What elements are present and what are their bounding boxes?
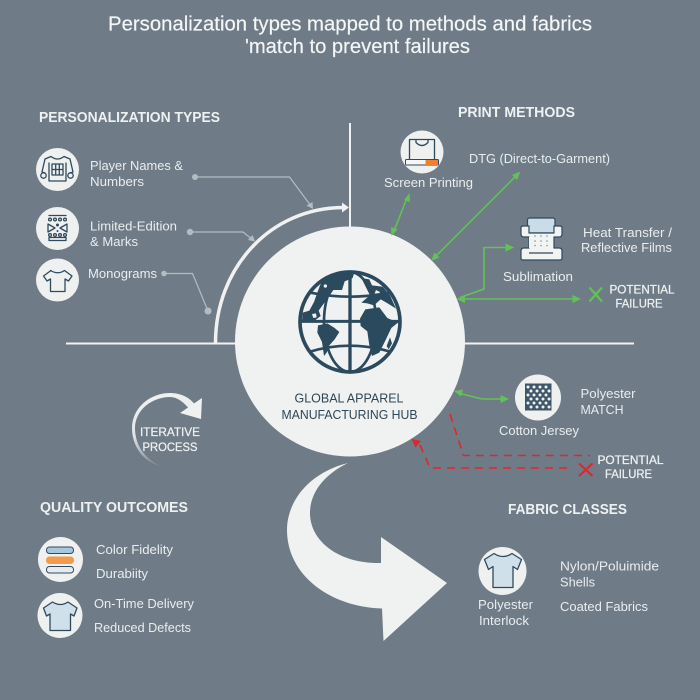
- arrow: hub to cotton jersey: [454, 390, 509, 403]
- label: nylon shells: Nylon/Poluimide: [560, 560, 659, 574]
- label: polyester interlock: Interlock: [479, 614, 530, 628]
- icon: t-shirt: [36, 258, 79, 302]
- hub circle: [235, 226, 465, 456]
- label: polyester interlock: Polyester: [478, 598, 533, 612]
- label: iterative process: [140, 425, 200, 454]
- icon: green cross: [590, 288, 602, 302]
- icon: knit swatch: [515, 374, 561, 420]
- label: polyester interlock: [478, 598, 533, 628]
- arrow: hub to DTG: [431, 172, 520, 261]
- label: player names and numbers: Player Names &: [90, 159, 184, 173]
- label: potential failure red: POTENTIAL: [598, 455, 664, 467]
- iterative process: [132, 393, 202, 466]
- label: polyester match: Polyester: [580, 387, 636, 401]
- label: player names and numbers: [90, 159, 184, 189]
- heading: print methods: PRINT METHODS: [458, 105, 575, 121]
- label: cotton jersey: Cotton Jersey: [499, 424, 580, 438]
- label: nylon shells: Shells: [560, 576, 595, 590]
- label: potential failure: FAILURE: [616, 298, 663, 310]
- label: coated fabrics: Coated Fabrics: [560, 600, 648, 614]
- iterative arc arrow: [132, 393, 202, 466]
- label: screen printing: Screen Printing: [384, 176, 473, 190]
- label: potential failure: POTENTIAL: [610, 284, 675, 296]
- label: durability: Durabiity: [96, 567, 149, 581]
- vertical axis line: [349, 123, 351, 230]
- icon: fabric layers: [38, 537, 83, 582]
- icon: sublimation press: [521, 218, 562, 260]
- hub label: [282, 392, 418, 422]
- hub label: GLOBAL APPAREL: [294, 392, 404, 406]
- title: Personalization types mapped to methods and fabrics: [108, 14, 592, 36]
- heading: personalization types: PERSONALIZATION TYPES: [39, 110, 220, 126]
- label: limited edition and marks: [90, 220, 177, 249]
- icon: globe: [300, 272, 400, 372]
- arrow: hub to potential failure: [456, 295, 581, 303]
- panel: print methods: [384, 105, 675, 310]
- curved arrow around hub: [216, 202, 349, 343]
- leader: monograms: [161, 271, 212, 314]
- icon: light blue tee: [478, 547, 526, 595]
- label: heat transfer and reflective films: Heat Transfer /: [583, 226, 673, 240]
- panel: personalization types: [36, 110, 313, 314]
- panel: quality outcomes: [38, 500, 195, 638]
- label: DTG: DTG (Direct-to-Garment): [469, 152, 610, 166]
- label: polyester match: MATCH: [580, 403, 624, 417]
- dashed failure line lower: [412, 439, 572, 468]
- heading: quality outcomes: QUALITY OUTCOMES: [40, 500, 188, 516]
- icon: jersey with numbers: [36, 148, 79, 191]
- label: reduced defects: Reduced Defects: [94, 621, 191, 635]
- label: heat transfer and reflective films: Reflective Films: [581, 241, 672, 255]
- icon: limited edition marks: [36, 207, 79, 250]
- title: [108, 14, 592, 58]
- big curved arrow: [287, 463, 447, 641]
- label: iterative process: PROCESS: [142, 440, 198, 454]
- leader arrow: limited edition: [187, 229, 255, 242]
- label: heat transfer and reflective films: [581, 226, 673, 255]
- arrow: hub to sublimation: [460, 244, 514, 298]
- icon: screen printing: [400, 130, 444, 174]
- leader arrow: player names: [192, 174, 313, 209]
- label: sublimation: Sublimation: [503, 270, 573, 284]
- label: nylon shells: [560, 560, 659, 590]
- label: on-time delivery: On-Time Delivery: [94, 597, 195, 611]
- label: limited edition and marks: Limited-Edition: [90, 220, 177, 234]
- label: player names and numbers: Numbers: [90, 175, 144, 189]
- icon: red cross: [579, 464, 592, 476]
- label: monograms: Monograms: [88, 267, 157, 281]
- label: polyester match: [580, 387, 636, 417]
- label: potential failure: [610, 284, 675, 310]
- panel: fabric classes: [412, 374, 664, 628]
- hub label: MANUFACTURING HUB: [282, 408, 418, 422]
- label: limited edition and marks: & Marks: [90, 235, 138, 249]
- horizontal axis line: [66, 342, 634, 344]
- label: potential failure red: [598, 455, 664, 481]
- title: 'match to prevent failures: [245, 36, 470, 58]
- heading: fabric classes: FABRIC CLASSES: [508, 502, 627, 518]
- icon: light tee outcome: [38, 593, 82, 638]
- arrow: hub to screen printing: [391, 193, 410, 236]
- dashed failure line upper: [450, 414, 590, 456]
- label: potential failure red: FAILURE: [605, 469, 652, 481]
- label: iterative process: ITERATIVE: [140, 425, 200, 439]
- label: color fidelity: Color Fidelity: [96, 543, 174, 557]
